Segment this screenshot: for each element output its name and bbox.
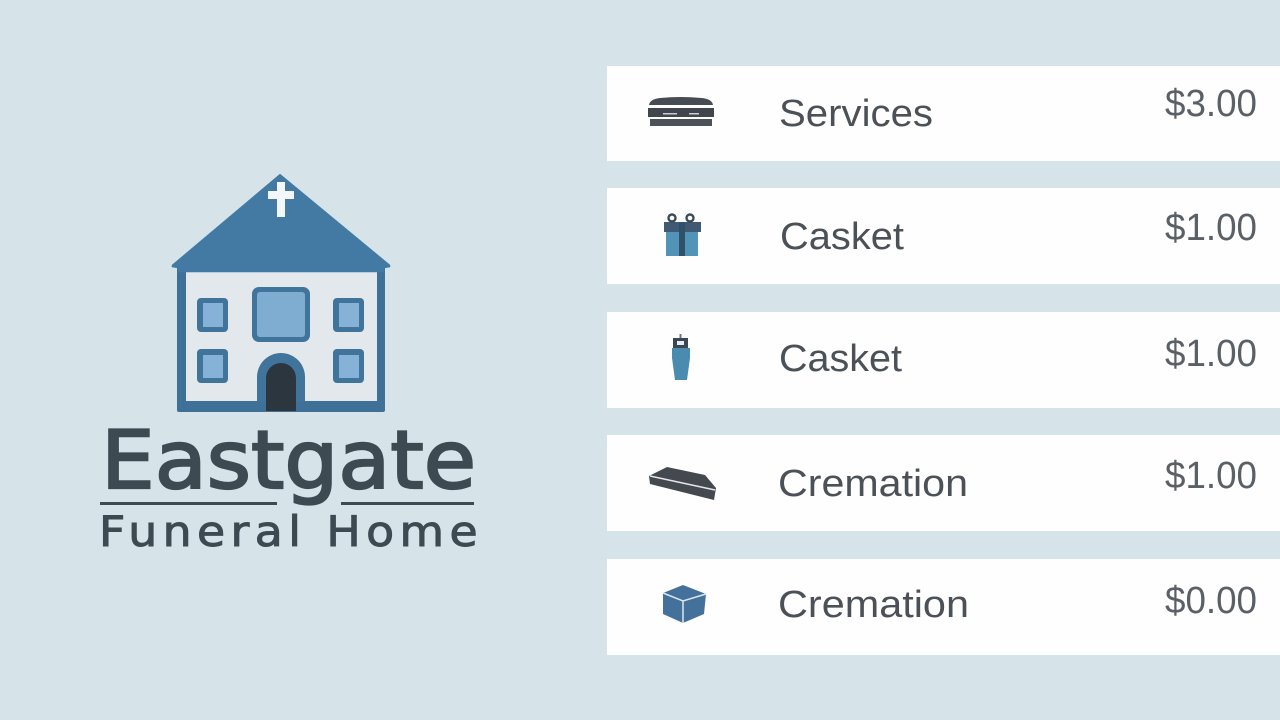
label: Cremation <box>778 584 969 626</box>
window: large centre <box>252 287 310 342</box>
label: Casket <box>779 338 902 380</box>
row 2: Casket <box>607 188 1280 284</box>
price: $1.00 <box>1165 333 1257 375</box>
logo subheading: Funeral Home: Funeral Home <box>99 507 483 556</box>
icon: cube <box>663 585 706 623</box>
door arch <box>257 353 305 402</box>
price: $1.00 <box>1165 455 1257 497</box>
window: lower left <box>197 349 228 383</box>
window: upper right <box>333 298 364 332</box>
icon: urn <box>672 334 690 380</box>
logo heading: Eastgate: Eastgate <box>101 414 476 507</box>
icon: gift box <box>664 214 701 256</box>
window: lower right <box>333 349 364 383</box>
icon: closed casket <box>648 97 714 126</box>
building walls <box>177 262 385 412</box>
roof <box>172 174 390 272</box>
logo: funeral home building <box>172 174 390 412</box>
price: $0.00 <box>1165 580 1257 622</box>
price: $1.00 <box>1165 207 1257 249</box>
price: $3.00 <box>1165 83 1257 125</box>
icon: angled casket <box>649 467 716 500</box>
row 3: Casket <box>607 312 1280 408</box>
door <box>266 363 296 411</box>
row 4: Cremation <box>607 435 1280 531</box>
label: Cremation <box>778 463 968 505</box>
wall interior <box>186 272 377 401</box>
cross <box>268 182 294 217</box>
label: Services <box>779 93 933 135</box>
row 5: Cremation <box>607 559 1280 655</box>
window: upper left <box>197 298 228 332</box>
row 1: Services <box>607 66 1280 161</box>
label: Casket <box>780 216 904 258</box>
